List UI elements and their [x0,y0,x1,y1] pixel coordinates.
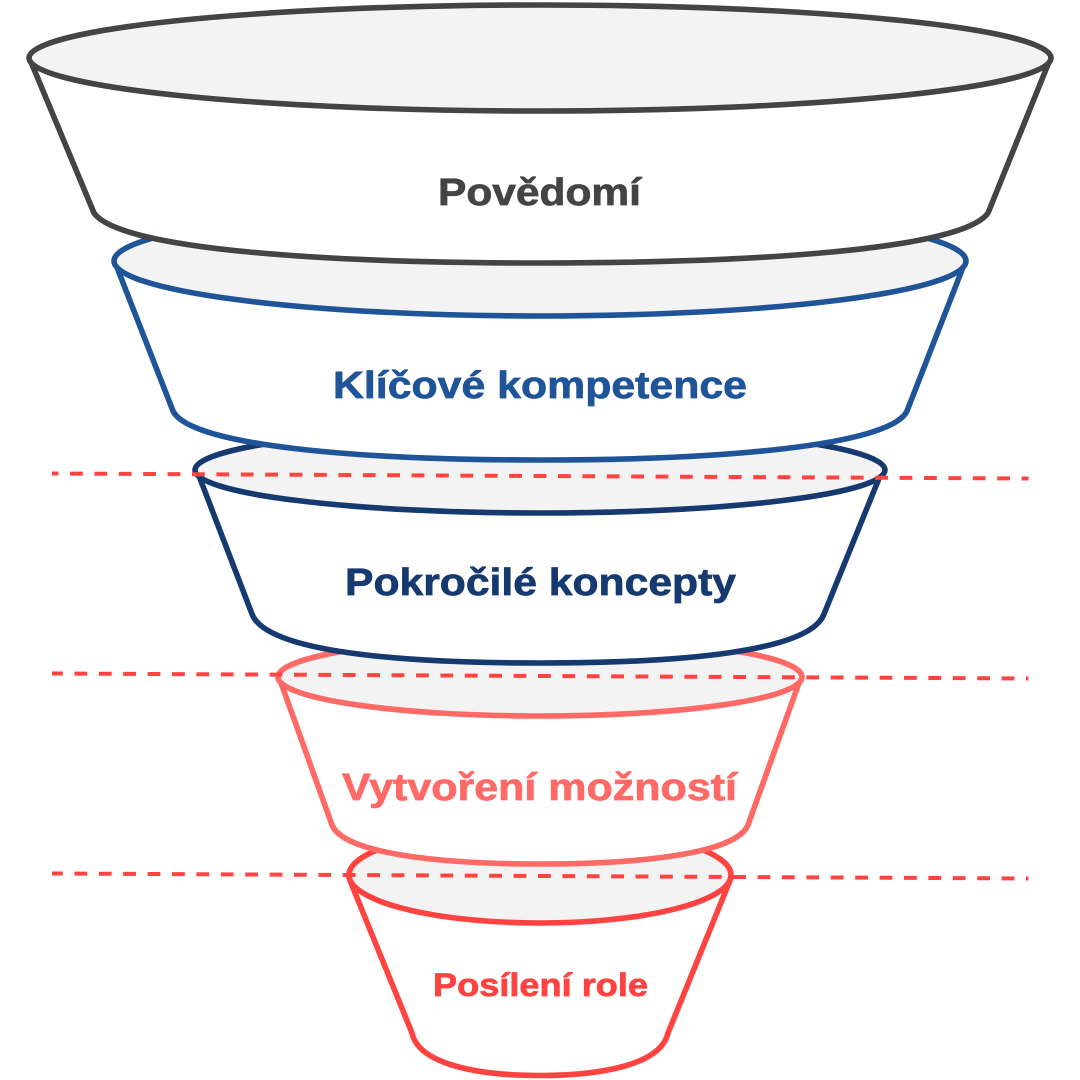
funnel level 4: Vytvoření možností [278,638,802,864]
label: Vytvoření možností: Vytvoření možností [342,767,739,809]
level 4 rim [278,638,802,716]
level 4 body [280,680,800,864]
dashed threshold line 1 [52,474,1028,478]
level 2 body [118,270,962,460]
level 5 body [349,878,731,1076]
funnel level 2: Klíčové kompetence [114,206,966,460]
level 1 body [31,62,1049,263]
funnel level 5: Posílení role [349,827,731,1076]
dashed threshold line 3 [52,874,1028,878]
level 5 rim [349,827,731,923]
label: Pokročilé koncepty: Pokročilé koncepty [345,562,736,604]
level 3 rim [195,427,885,513]
funnel level 1: Povědomí [29,5,1051,263]
dashed threshold line 2 [52,674,1028,678]
funnel level 3: Pokročilé koncepty [195,427,885,663]
label: Posílení role: Posílení role [433,967,648,1003]
level 1 rim [29,5,1051,111]
label: Klíčové kompetence: Klíčové kompetence [333,365,747,407]
level 2 rim [114,206,966,316]
label: Povědomí: Povědomí [438,172,643,214]
level 3 body [199,476,880,663]
